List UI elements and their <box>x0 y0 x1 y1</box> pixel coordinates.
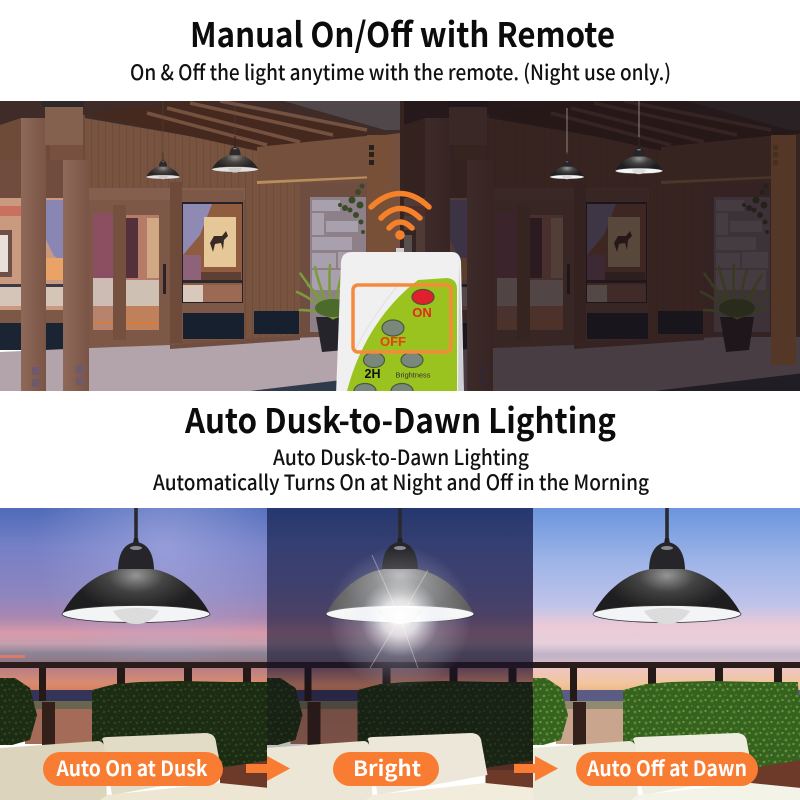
lamp: large porch lamp <box>615 101 663 174</box>
button: lower right <box>390 382 414 391</box>
pill: bright: Bright <box>353 753 421 783</box>
label: 2H: 2H <box>365 367 380 381</box>
lamp: small porch lamp <box>550 108 584 179</box>
lamp: dawn <box>593 508 741 624</box>
photo: porch lights off, dark <box>400 100 800 395</box>
pill: auto on at dusk: Auto On at Dusk <box>56 753 208 783</box>
label: on: ON <box>412 305 432 320</box>
lamp: small porch lamp lit <box>146 101 180 179</box>
lamp: large porch lamp lit <box>212 101 258 173</box>
arrow: dusk to bright <box>246 756 290 781</box>
title: manual on/off: Manual On/Off with Remote <box>190 8 615 57</box>
pill: auto off at dawn: Auto Off at Dawn <box>586 753 747 783</box>
remote control <box>336 248 464 398</box>
panel: dusk <box>0 508 270 800</box>
label: off: OFF <box>380 334 406 349</box>
lamp: bright <box>326 508 474 690</box>
panel: dawn <box>531 508 800 800</box>
button: brightness <box>401 352 423 368</box>
highlight frame <box>353 285 451 352</box>
subtitle: remote use: On & Off the light anytime with the remote. (Night use only.) <box>130 57 671 87</box>
pill: bright <box>333 752 439 786</box>
panel: bright, lamp lit at night <box>267 508 533 800</box>
button: lower left <box>353 382 377 391</box>
heading: auto dusk-to-dawn: Auto Dusk-to-Dawn Lighting <box>184 394 616 443</box>
lamp: dusk <box>62 508 210 624</box>
label: brightness: Brightness <box>396 370 431 380</box>
photo: porch lights on <box>0 100 410 395</box>
subheading line 1: Auto Dusk-to-Dawn Lighting <box>273 442 529 472</box>
icon: wifi signal <box>371 194 429 240</box>
button: on <box>412 290 434 304</box>
subheading line 2: Automatically Turns On at Night and Off in the Morning <box>153 467 649 497</box>
button: 2H <box>364 352 384 368</box>
arrow: bright to dawn <box>514 756 558 781</box>
button: off <box>382 320 404 336</box>
